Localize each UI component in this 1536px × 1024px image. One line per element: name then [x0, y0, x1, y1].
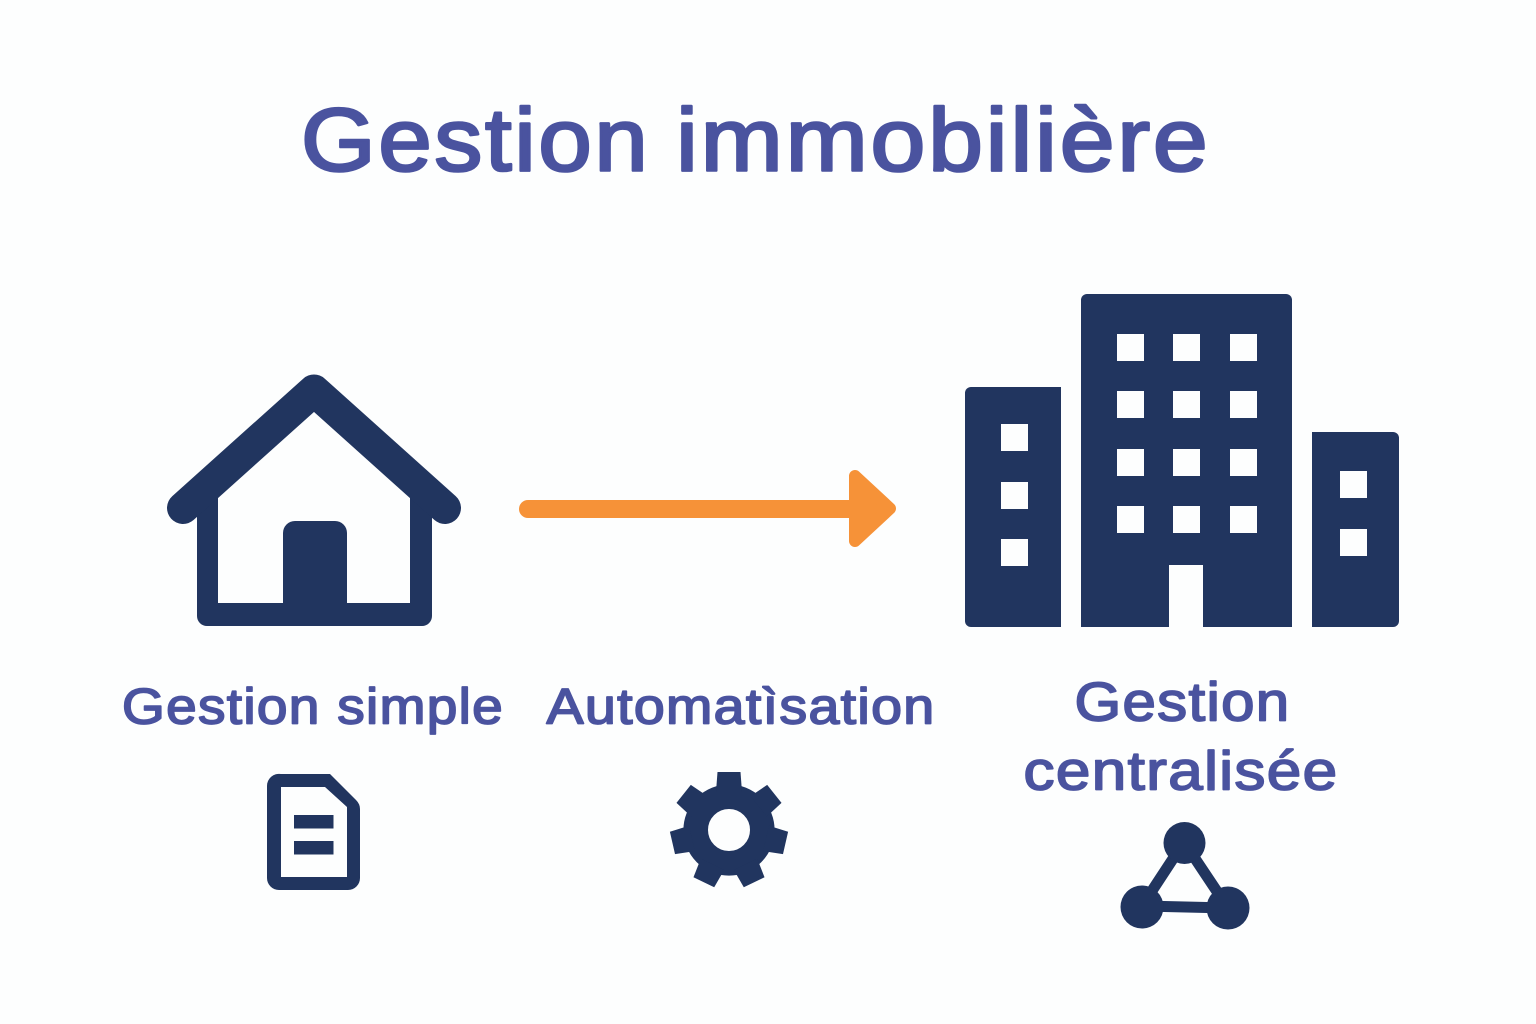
building: centre	[1081, 294, 1292, 627]
label: gestion centralisée: centralisée	[1024, 740, 1338, 802]
label: gestion centralisée	[1024, 672, 1338, 802]
label: gestion simple: Gestion simple	[122, 678, 504, 734]
label: automatisation: Automatìsation	[546, 678, 936, 734]
label: gestion centralisée: Gestion	[1074, 672, 1290, 732]
title: Gestion	[301, 90, 650, 190]
title: immobilière	[676, 90, 1210, 190]
icon: buildings	[965, 294, 1399, 627]
building: right	[1312, 432, 1399, 627]
icon: document	[267, 774, 360, 890]
arrow: progression	[528, 476, 890, 541]
icon: network	[1120, 822, 1250, 930]
icon: house	[183, 390, 445, 626]
building: left	[965, 387, 1061, 627]
icon: gear	[670, 772, 788, 888]
title	[301, 90, 1210, 190]
